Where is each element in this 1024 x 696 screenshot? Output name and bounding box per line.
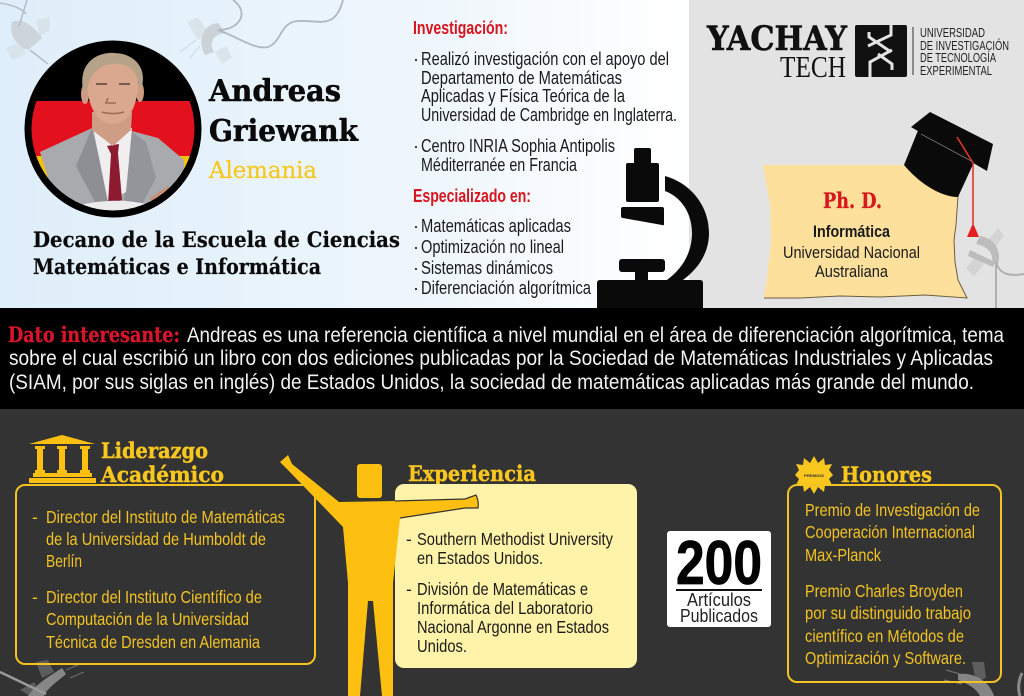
panel: academic leadership	[16, 485, 315, 664]
text: research section	[413, 18, 677, 175]
panel: honors: por su distinguido trabajo	[805, 603, 971, 623]
decoration: plug top left	[0, 0, 50, 64]
panel: interesting fact band	[0, 308, 1024, 409]
heading: name	[208, 74, 359, 149]
panel: experience: -	[406, 529, 412, 549]
panel: experience: -	[406, 579, 412, 599]
text: country: Alemania	[208, 158, 317, 184]
icon: person figure	[280, 455, 478, 696]
text: specialties section: ·	[413, 216, 419, 236]
text: specialties section: Especializado en:	[413, 186, 531, 206]
panel: academic leadership: Computación de la Universidad	[46, 609, 249, 629]
icon: temple	[29, 435, 96, 483]
heading: honors: Honores	[841, 462, 932, 487]
text: specialties section	[413, 186, 592, 298]
stat: 200 articles: 200	[676, 529, 762, 598]
panel: experience	[395, 484, 637, 668]
text: degree details: Informática	[813, 222, 890, 241]
stat: 200 articles	[667, 529, 771, 627]
text: research section: Méditerranée en Francia	[421, 155, 578, 175]
icon: award star	[795, 456, 833, 494]
panel: academic leadership: -	[32, 587, 38, 607]
stat: 200 articles: Artículos	[687, 590, 751, 610]
heading: name: Griewank	[209, 114, 359, 149]
logo: Yachay Tech: UNIVERSIDAD	[920, 26, 985, 40]
decoration: plug right	[966, 228, 1024, 308]
text: interesting fact: Dato interesante:	[8, 322, 180, 347]
text: research section: Aplicadas y Física Teórica de la	[421, 86, 626, 106]
panel: parchment with degree	[763, 165, 967, 298]
panel: academic leadership: -	[32, 507, 38, 527]
logo: Yachay Tech: YACHAY	[706, 19, 848, 59]
panel: honors: Optimización y Software.	[805, 648, 966, 668]
text: research section: Realizó investigación con el apoyo del	[421, 49, 669, 69]
logo: Yachay Tech	[706, 19, 1009, 84]
heading: academic leadership: Académico	[100, 462, 224, 487]
text: position: Decano de la Escuela de Ciencias	[33, 227, 400, 252]
panel: honors: Max-Planck	[805, 545, 881, 565]
text: degree details: Australiana	[815, 262, 888, 281]
text: specialties section: Matemáticas aplicadas	[421, 216, 571, 236]
logo: Yachay Tech: DE TECNOLOGÍA	[920, 50, 996, 65]
text: specialties section: Sistemas dinámicos	[421, 258, 553, 278]
panel: top left background	[0, 0, 689, 308]
heading: experience: Experiencia	[408, 461, 536, 486]
text: degree details	[783, 222, 920, 281]
stat: 200 articles: Publicados	[680, 606, 758, 626]
text: specialties section: Diferenciación algorítmica	[421, 278, 592, 298]
text: interesting fact	[8, 322, 1004, 394]
panel: academic leadership: Técnica de Dresden en Alemania	[46, 632, 260, 652]
text: research section: Investigación:	[413, 18, 508, 38]
panel: academic leadership: Director del Instituto Científico de	[46, 587, 262, 607]
logo: Yachay Tech: EXPERIMENTAL	[920, 64, 992, 78]
text: specialties section: ·	[413, 278, 419, 298]
text: specialties section: Optimización no lineal	[421, 237, 564, 257]
heading: Ph. D.: Ph. D.	[823, 188, 882, 213]
portrait with German flag	[25, 41, 201, 216]
decoration: plug top centre	[180, 0, 343, 64]
panel: academic leadership: de la Universidad de Humboldt de	[46, 529, 266, 549]
panel: honors	[788, 485, 1001, 682]
panel: honors: Cooperación Internacional	[805, 522, 975, 542]
text: research section: Departamento de Matemáticas	[421, 68, 622, 88]
logo: Yachay Tech: TECH	[780, 49, 846, 84]
panel: experience: Informática del Laboratorio	[417, 598, 593, 618]
text: degree details: Universidad Nacional	[783, 243, 920, 262]
heading: name: Andreas	[208, 74, 341, 109]
text: position	[33, 227, 400, 279]
text: specialties section: ·	[413, 237, 419, 257]
panel: experience: Southern Methodist University	[417, 529, 613, 549]
icon: award star: PREMIOS	[804, 473, 824, 478]
text: research section: ·	[413, 136, 419, 156]
text: research section: Universidad de Cambridge en Inglaterra.	[421, 105, 677, 125]
panel: honors: Premio de Investigación de	[805, 500, 980, 520]
panel: top right background	[689, 0, 1024, 308]
panel: honors: científico en Métodos de	[805, 626, 964, 646]
panel: academic leadership: Berlín	[46, 551, 82, 571]
panel: dark lower background	[0, 409, 1024, 696]
panel: experience: Nacional Argonne en Estados	[417, 617, 609, 637]
text: position: Matemáticas e Informática	[33, 254, 321, 279]
heading: academic leadership	[100, 438, 224, 487]
heading: academic leadership: Liderazgo	[101, 438, 208, 463]
icon: microscope	[597, 148, 709, 308]
panel: experience: Unidos.	[417, 636, 467, 656]
text: specialties section: ·	[413, 258, 419, 278]
text: research section: ·	[413, 49, 419, 69]
decoration: plug bottom right	[944, 662, 1022, 696]
icon: graduation cap	[904, 112, 993, 237]
decoration: plug bottom left	[0, 660, 84, 696]
panel: honors: Premio Charles Broyden	[805, 581, 963, 601]
panel: experience: en Estados Unidos.	[417, 548, 543, 568]
panel: academic leadership: Director del Instituto de Matemáticas	[46, 507, 285, 527]
text: research section: Centro INRIA Sophia Antipolis	[421, 136, 615, 156]
panel: experience: División de Matemáticas e	[417, 579, 588, 599]
